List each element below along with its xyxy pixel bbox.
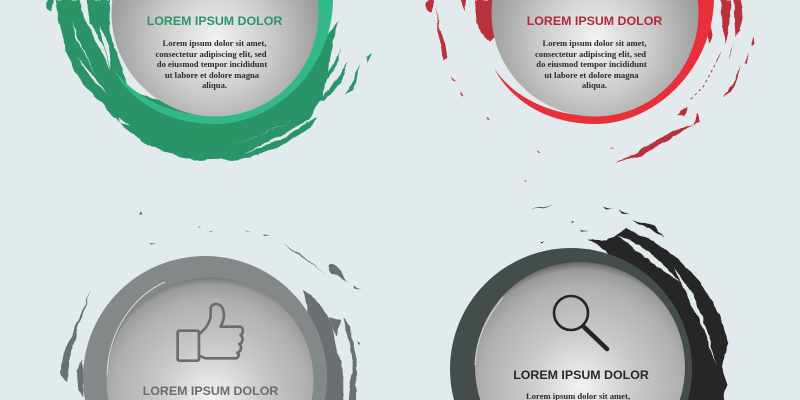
green heading: LOREM IPSUM DOLOR	[147, 14, 282, 28]
icon: thumbs up	[178, 304, 243, 361]
red heading: LOREM IPSUM DOLOR	[527, 14, 662, 28]
red body text	[535, 38, 647, 90]
green body text: Lorem ipsum dolor sit amet,	[162, 38, 266, 48]
green body text: consectetur adipiscing elit, sed	[155, 49, 267, 59]
red body text: Lorem ipsum dolor sit amet,	[542, 38, 646, 48]
green body text: ut labore et dolore magna	[165, 70, 260, 80]
grey brush strokes	[60, 212, 362, 400]
black ring	[450, 248, 692, 400]
green brush stroke	[46, 0, 371, 161]
grey ring	[83, 256, 327, 400]
green inner ring	[113, 0, 333, 124]
black grey disc	[475, 262, 685, 400]
red grey disc	[492, 0, 698, 116]
red speckle trail	[690, 65, 715, 100]
grey disc highlight	[107, 282, 165, 375]
red body text: ut labore et dolore magna	[544, 70, 639, 80]
red brush strokes	[425, 0, 755, 182]
panel: black brush circle	[450, 205, 729, 400]
black brush strokes	[531, 205, 729, 400]
panel: grey brush circle	[60, 212, 362, 400]
red body text: aliqua.	[582, 80, 607, 90]
black disc highlight	[475, 297, 503, 365]
panel: red brush circle	[425, 0, 755, 182]
grey disc	[106, 278, 314, 400]
black brush gaps	[617, 236, 717, 365]
red inner ring	[494, 0, 714, 124]
green body text	[155, 38, 267, 90]
red body text: do eiusmod tempor incididunt	[536, 59, 647, 69]
green grey disc	[112, 0, 318, 116]
panel: green brush circle	[46, 0, 371, 161]
red body text: consectetur adipiscing elit, sed	[535, 49, 646, 59]
green brush gaps	[68, 0, 317, 154]
black heading: LOREM IPSUM DOLOR	[513, 368, 649, 382]
grey heading: LOREM IPSUM DOLOR	[143, 384, 278, 398]
green body text: aliqua.	[202, 80, 227, 90]
green body text: do eiusmod tempor incididunt	[157, 59, 267, 69]
icon: magnifying glass	[554, 296, 607, 349]
